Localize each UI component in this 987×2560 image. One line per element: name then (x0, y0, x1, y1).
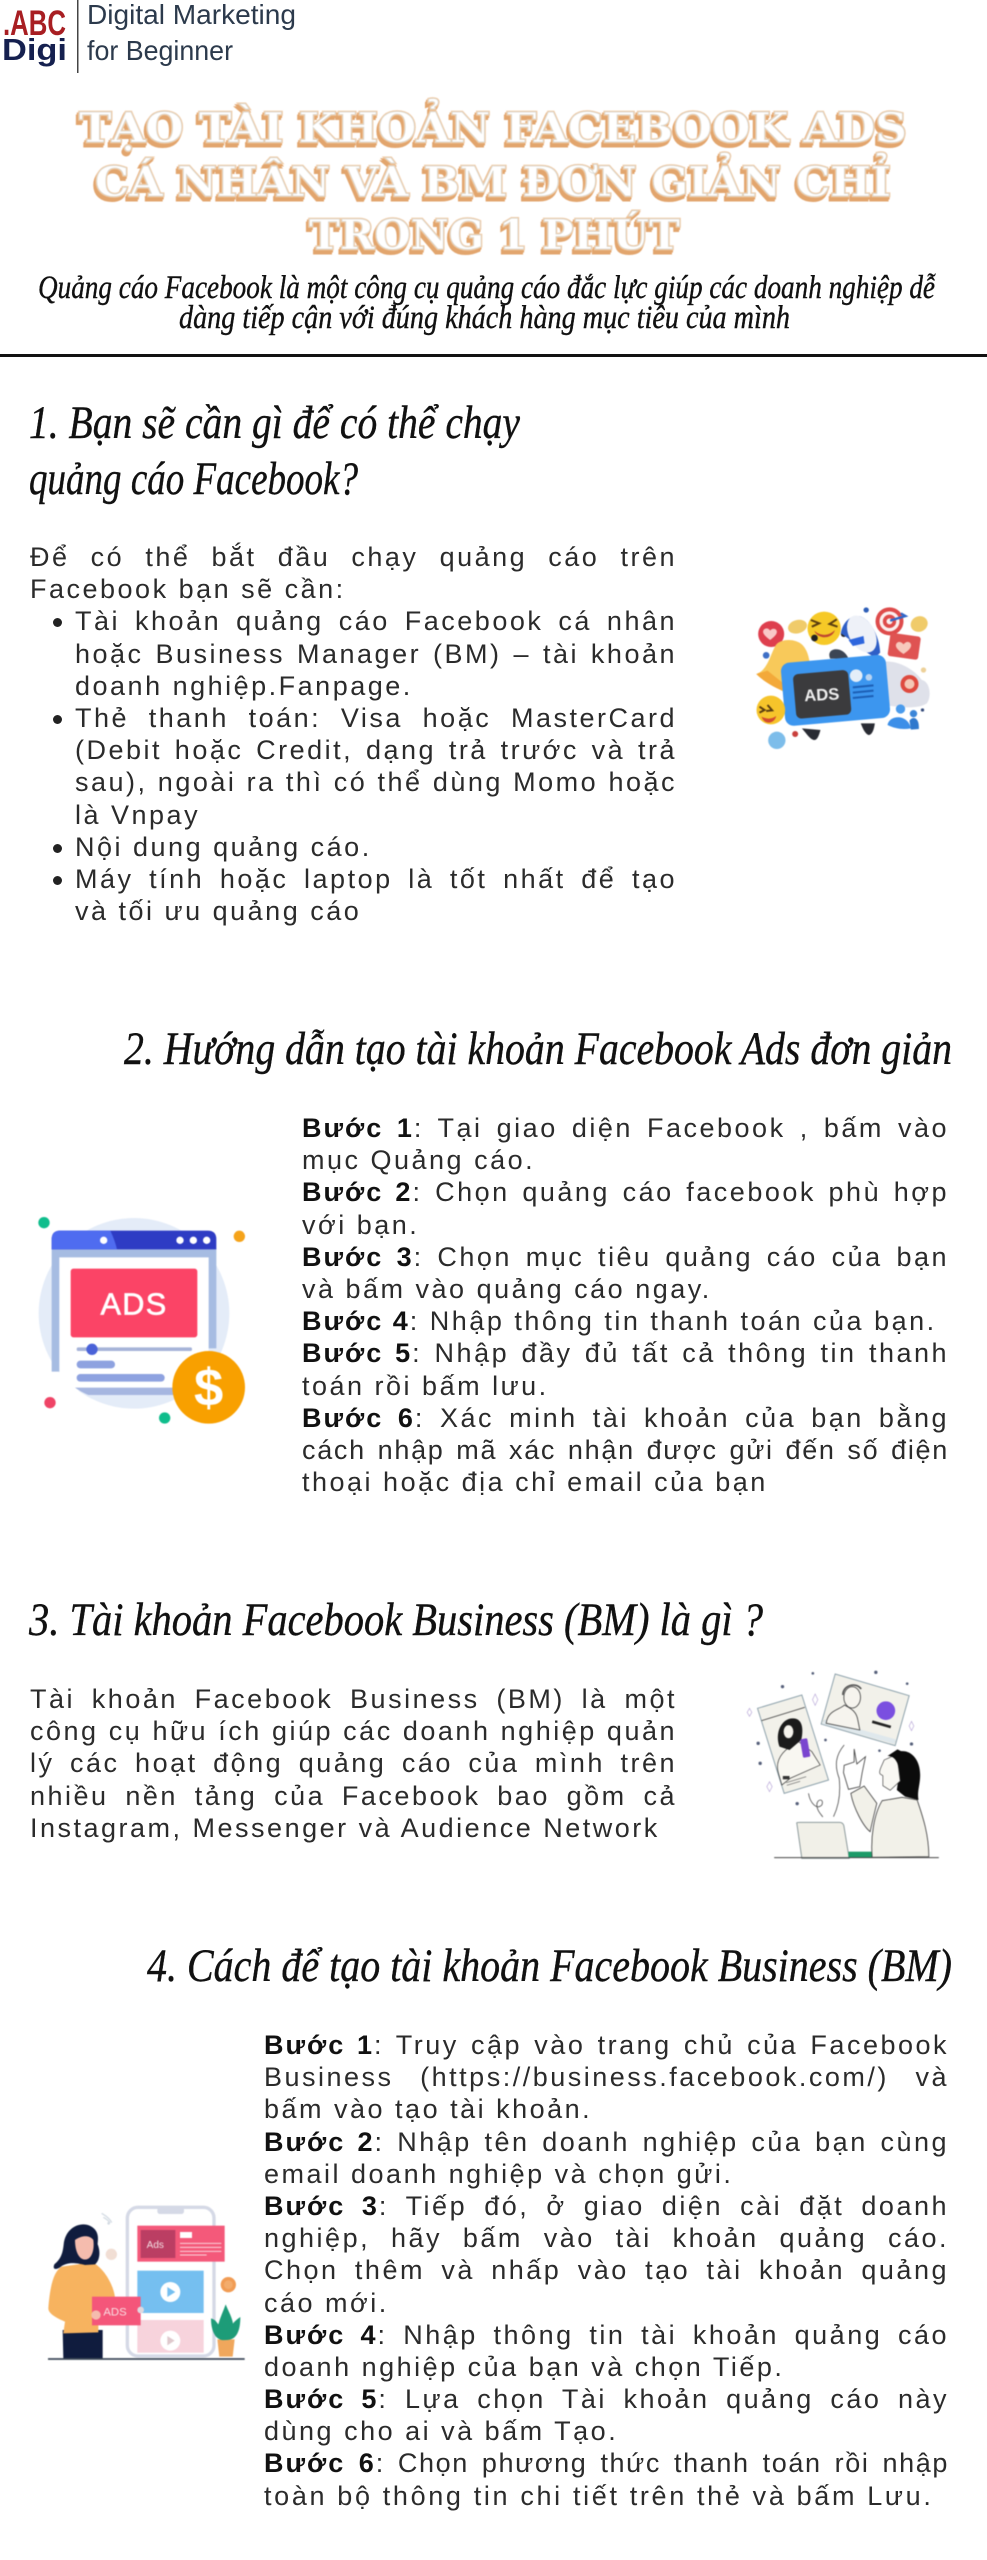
text: section 4: doanh nghiệp của bạn và chọn Tiếp. (264, 2352, 784, 2382)
text: section 1: là Vnpay (75, 800, 200, 830)
text: section 4: toàn bộ thông tin chi tiết trên thẻ và bấm Lưu. (264, 2481, 933, 2511)
logo: Digi (2, 32, 67, 67)
subtitle: dàng tiếp cận với đúng khách hàng mục tiêu của mình (179, 300, 790, 336)
icon: woman with phone ads (47, 2205, 246, 2361)
text: section 1: Facebook bạn sẽ cần: (30, 574, 346, 604)
text: section 2: thoại hoặc địa chỉ email của bạn (302, 1467, 768, 1497)
text: section 1: (Debit hoặc Credit, dạng trả trước và trả (75, 735, 677, 765)
text: section 4: Chọn thêm và nhấp vào tạo tài khoản quảng (264, 2255, 949, 2285)
icon: ads browser window: $ (194, 1358, 223, 1417)
text: section 3: nhiều nền tảng của Facebook bao gồm cả (30, 1781, 677, 1811)
icon: woman with phone ads: Ads (147, 2240, 164, 2251)
text: section 1 (30, 542, 677, 926)
text: section 2: Bước 3: Chọn mục tiêu quảng cáo của bạn (302, 1242, 949, 1272)
text: section 1: Nội dung quảng cáo. (75, 832, 372, 862)
text: section 2: với bạn. (302, 1210, 419, 1240)
text: section 1: doanh nghiệp.Fanpage. (75, 671, 413, 701)
text: section 4: Bước 5: Lựa chọn Tài khoản quảng cáo này (264, 2384, 949, 2414)
text: section 3 (30, 1684, 677, 1843)
text: section 2: Bước 4: Nhập thông tin thanh toán của bạn. (302, 1306, 937, 1336)
text: section 1: Để có thể bắt đầu chạy quảng cáo trên (30, 542, 677, 572)
logo: for Beginner (87, 35, 233, 66)
text: section 4: Bước 3: Tiếp đó, ở giao diện cài đặt doanh (264, 2191, 949, 2221)
text: section 2: toán rồi bấm lưu. (302, 1370, 549, 1400)
icon: woman with floating social cards (746, 1670, 940, 1860)
heading 1: 1. Bạn sẽ cần gì để có thể chạy (29, 397, 520, 449)
text: section 4: Bước 1: Truy cập vào trang chủ của Facebook (264, 2030, 949, 2060)
text: section 4: dùng cho ai và bấm Tạo. (264, 2416, 618, 2446)
text: section 3: Instagram, Messenger và Audience Network (30, 1813, 660, 1843)
text: section 1: và tối ưu quảng cáo (75, 896, 361, 926)
icon: ads browser window: ADS (100, 1287, 168, 1321)
text: section 3: lý các hoạt động quảng cáo của mình trên (30, 1748, 677, 1778)
text: section 2: Bước 2: Chọn quảng cáo facebook phù hợp (302, 1177, 949, 1207)
icon: woman with phone ads: ADS (103, 2306, 127, 2318)
text: section 1: Máy tính hoặc laptop là tốt nhất để tạo (75, 864, 677, 894)
text: section 4: cáo mới. (264, 2288, 389, 2318)
heading 3: 3. Tài khoản Facebook Business (BM) là gì ? (28, 1594, 763, 1646)
logo (2, 0, 296, 73)
icon: ads browser window (38, 1216, 246, 1424)
text: section 2: mục Quảng cáo. (302, 1145, 535, 1175)
logo: .ABC (3, 4, 66, 43)
heading 1 (29, 397, 520, 505)
text: section 1: Tài khoản quảng cáo Facebook cá nhân (75, 606, 677, 636)
header divider (0, 354, 987, 357)
icon: ads tv with emojis (756, 606, 930, 750)
text: section 4: nghiệp, hãy bấm vào tài khoản quảng cáo. (264, 2223, 949, 2253)
text: section 2 (302, 1113, 949, 1497)
text: section 2: và bấm vào quảng cáo ngay. (302, 1274, 712, 1304)
text: section 2: cách nhập mã xác nhận được gửi đến số điện (302, 1435, 949, 1465)
text: section 2: Bước 1: Tại giao diện Facebook , bấm vào (302, 1113, 949, 1143)
text: section 2: Bước 5: Nhập đầy đủ tất cả thông tin thanh (302, 1338, 949, 1368)
icon: ads tv with emojis: ADS (804, 684, 840, 705)
text: section 3: Tài khoản Facebook Business (BM) là một (30, 1684, 677, 1714)
text: section 3: công cụ hữu ích giúp các doanh nghiệp quản (30, 1716, 677, 1746)
text: section 4: Bước 6: Chọn phương thức thanh toán rồi nhập (264, 2448, 949, 2478)
text: section 1: hoặc Business Manager (BM) – tài khoản (75, 639, 677, 669)
text: section 1: Thẻ thanh toán: Visa hoặc MasterCard (75, 703, 677, 733)
subtitle (38, 270, 936, 336)
text: section 1: sau), ngoài ra thì có thể dùng Momo hoặc (75, 767, 677, 797)
title (75, 96, 906, 256)
text: section 4: Business (https://business.facebook.com/) và (264, 2062, 949, 2092)
text: section 4: Bước 4: Nhập thông tin tài khoản quảng cáo (264, 2320, 949, 2350)
text: section 4: email doanh nghiệp và chọn gửi. (264, 2159, 733, 2189)
text: section 4: Bước 2: Nhập tên doanh nghiệp của bạn cùng (264, 2127, 949, 2157)
text: section 2: Bước 6: Xác minh tài khoản của bạn bằng (302, 1403, 949, 1433)
text: section 4: bấm vào tạo tài khoản. (264, 2094, 592, 2124)
heading 1: quảng cáo Facebook? (29, 453, 358, 505)
text: section 4 (264, 2030, 949, 2511)
